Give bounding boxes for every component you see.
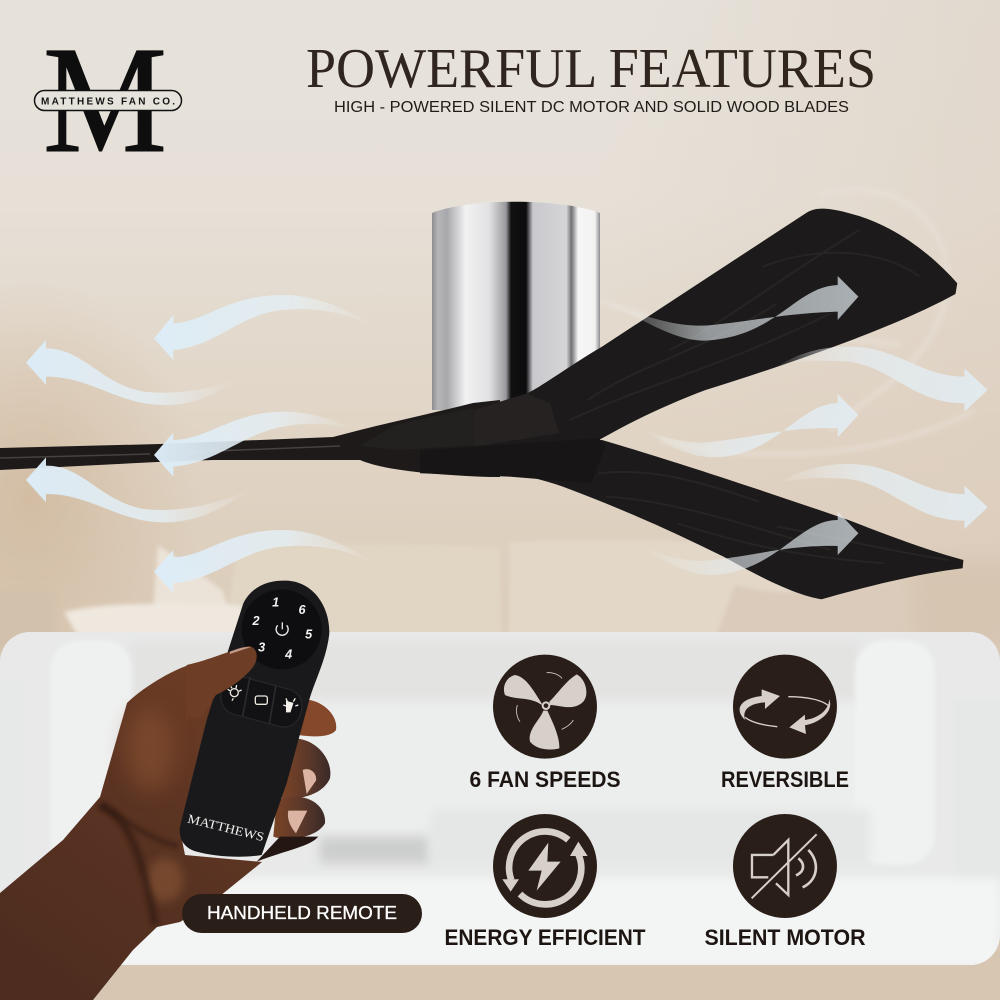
faint air swirls: [600, 189, 975, 454]
icon: reverse: [255, 696, 267, 704]
arrow right 5 (on lower blade): [634, 512, 858, 575]
palm and arm: [0, 663, 262, 1000]
fan motor: chrome housing: [432, 202, 600, 410]
icon: fan: [493, 655, 597, 759]
logo: Matthews Fan Co.: MATTHEWS FAN CO.: [41, 96, 175, 108]
arrow right 2: [777, 347, 988, 412]
remote speed numbers: 4: [284, 648, 292, 662]
floor strip: [0, 960, 1000, 1000]
hand holding remote: [0, 581, 336, 1000]
remote power icon: [276, 622, 288, 635]
fan blades: dark wood: [0, 209, 963, 599]
remote brand text: MATTHEWS: [186, 812, 266, 844]
feature: energy efficient: [444, 814, 646, 950]
airflow arrows blowing right: [606, 276, 988, 575]
icon: dim light: [228, 685, 242, 701]
title: POWERFUL FEATURES: [306, 38, 876, 100]
upper right blade: [420, 209, 963, 599]
sofa cushions: [222, 544, 502, 640]
remote speed numbers: 2: [251, 614, 260, 628]
skin shading: [100, 708, 183, 925]
remote speed numbers: 1: [272, 596, 279, 610]
remote speed numbers: 5: [305, 628, 313, 642]
fingers behind remote: [257, 699, 336, 862]
label: REVERSIBLE: [721, 767, 849, 792]
subtitle: HIGH - POWERED SILENT DC MOTOR AND SOLID WOOD BLADES: [334, 99, 849, 116]
feature: silent motor: [704, 814, 866, 950]
left blade grain: [0, 446, 340, 458]
thumb: [185, 646, 257, 720]
logo: Matthews Fan Co.: M: [43, 16, 167, 185]
remote dial: [242, 589, 322, 669]
remote speed numbers: 6: [298, 603, 306, 617]
label: handheld remote: HANDHELD REMOTE: [207, 903, 397, 923]
hub underside: [420, 438, 606, 483]
label: handheld remote: [182, 894, 422, 933]
remote body: [180, 581, 329, 857]
arrow left 2: [26, 340, 233, 405]
feature: reversible: [721, 655, 849, 792]
arrow right 3: [641, 394, 858, 457]
arrow left 1: [154, 295, 377, 360]
remote function buttons: [217, 673, 306, 731]
icon: energy cycle: [493, 814, 597, 918]
icon: bright light: [283, 698, 298, 712]
label: 6 FAN SPEEDS: [470, 767, 620, 792]
panel: translucent features backdrop: [0, 632, 1000, 965]
airflow arrows blowing left: [26, 295, 377, 593]
arrow right 4: [777, 464, 988, 529]
arrow left 3: [154, 412, 353, 477]
icon: muted speaker: [733, 814, 837, 918]
left blade: [0, 400, 500, 477]
arrow right 1 (on upper blade): [606, 276, 858, 341]
white sofa seen through the panel: [0, 632, 1000, 968]
remote speed numbers: [251, 596, 313, 662]
arrow left 5: [154, 530, 377, 593]
icon: rotation arrows: [733, 655, 837, 759]
lower right blade: [491, 440, 963, 599]
remote speed numbers: 3: [258, 640, 265, 654]
label: SILENT MOTOR: [704, 925, 866, 950]
arrow left 4: [26, 457, 250, 522]
feature: 6 fan speeds: [470, 655, 620, 792]
label: ENERGY EFFICIENT: [444, 925, 646, 950]
